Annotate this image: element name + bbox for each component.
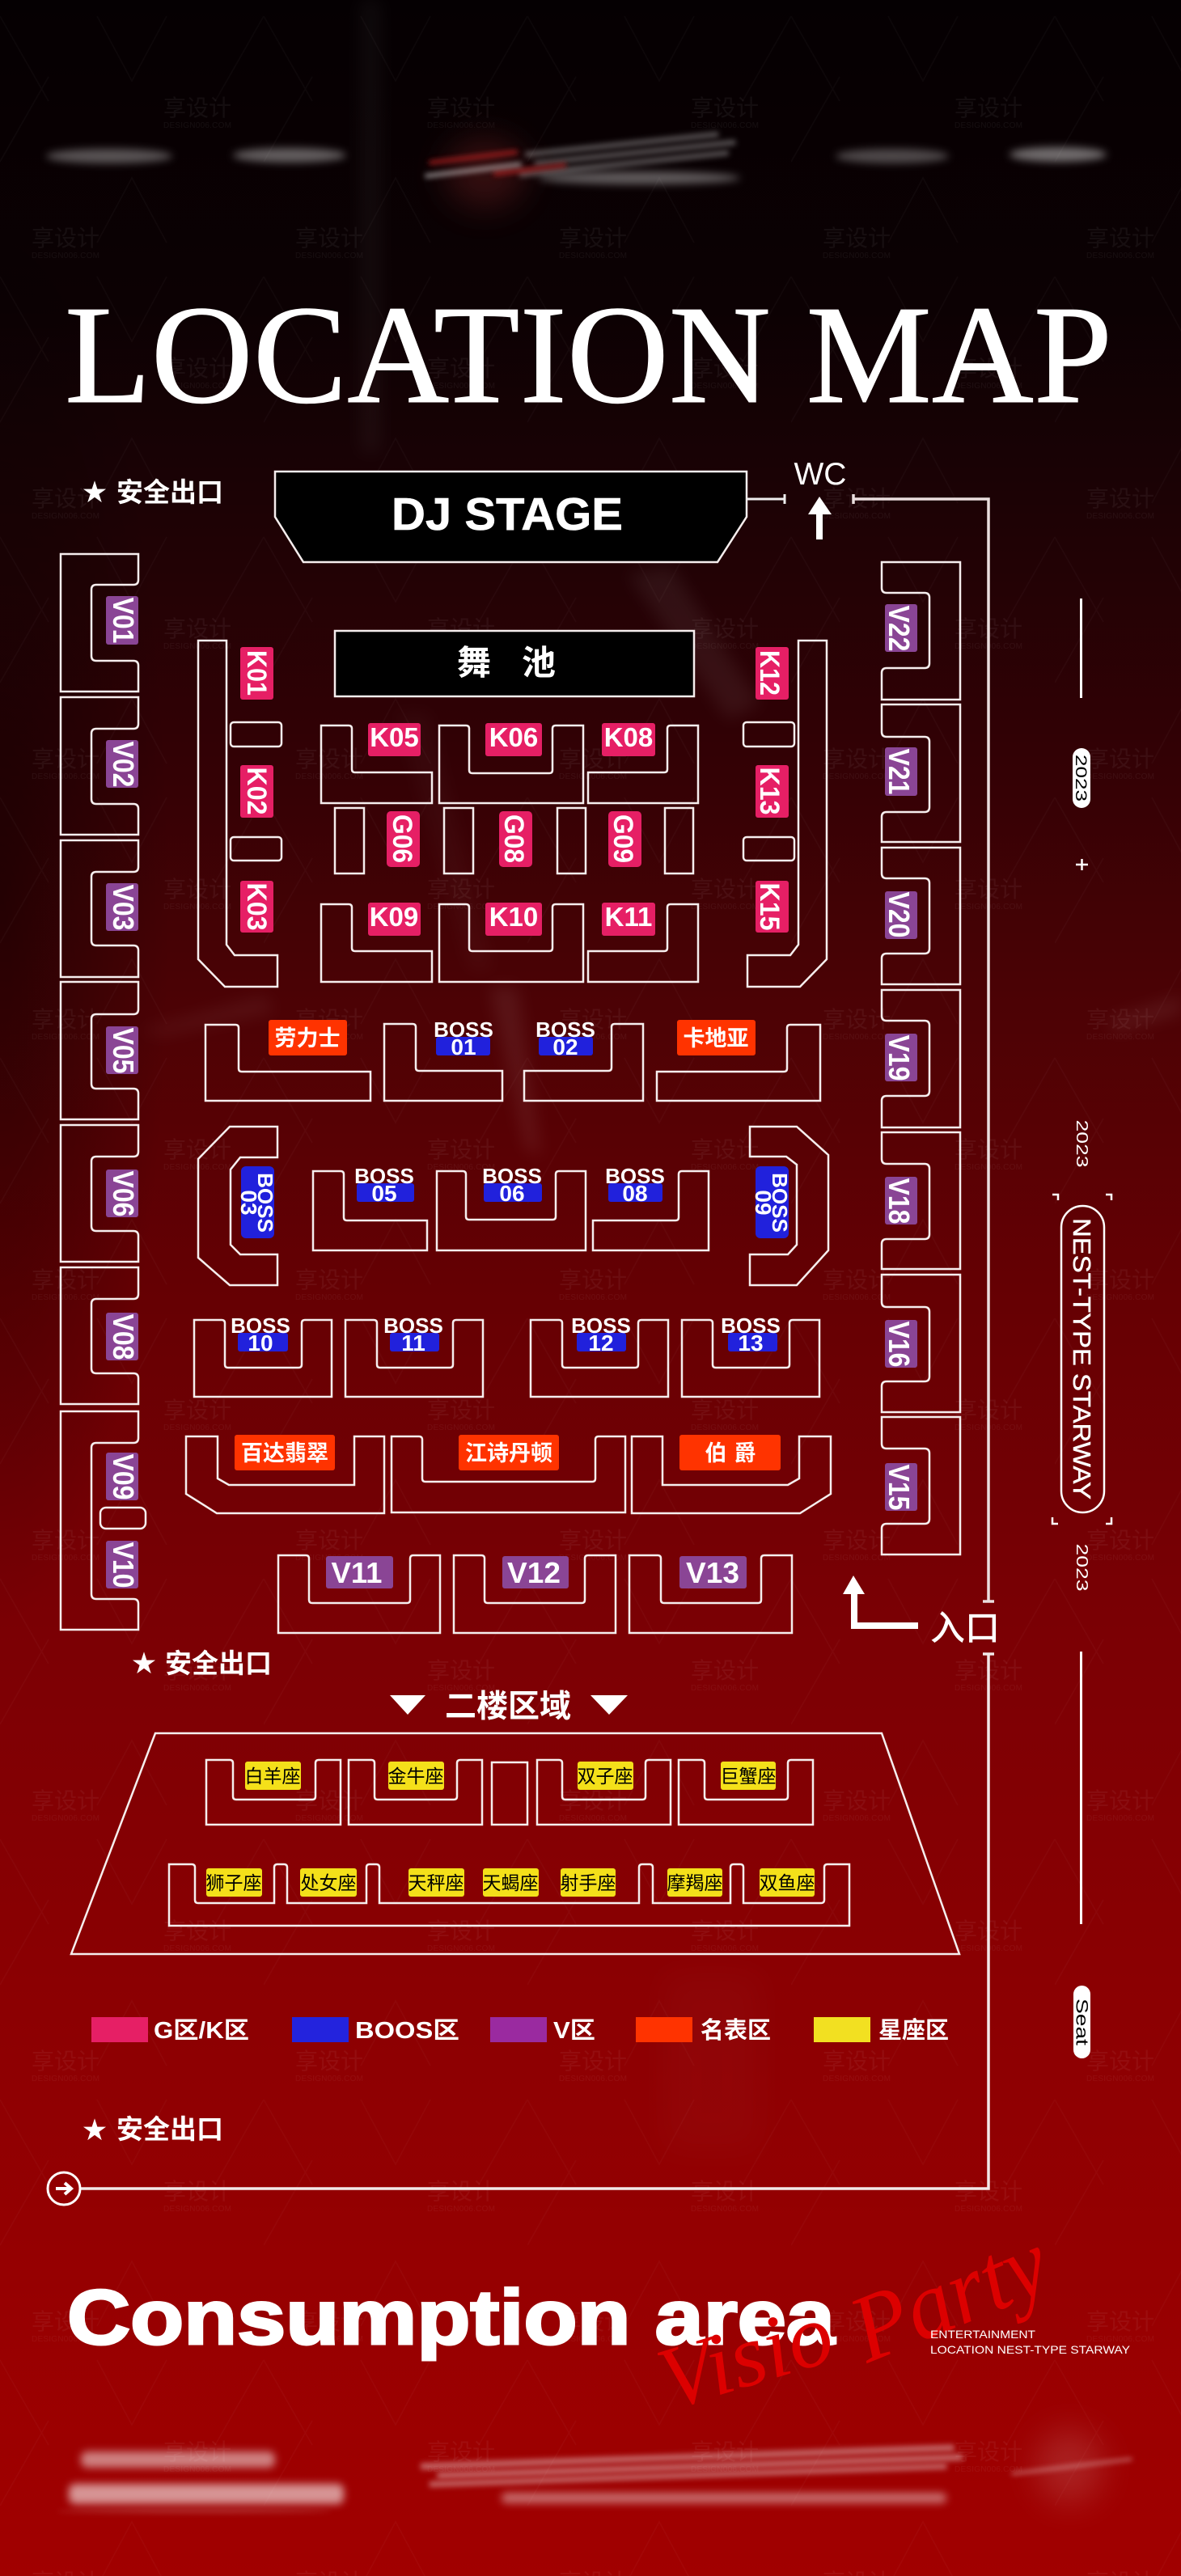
seat V01 [61,554,140,692]
seat 伯爵: 爵 [734,1441,756,1466]
script: Visio: Visio [646,2283,844,2429]
boss row 2 [198,1127,828,1285]
legend: 名表区 [701,2017,771,2044]
seat V21: V21 [883,749,916,794]
seat G08 [444,808,532,873]
seat V18 [882,1132,960,1269]
seat BOSS 08: BOSS [605,1164,665,1188]
lower constellation seats: 双鱼座 [759,1872,815,1893]
DJ stage: DJ STAGE [392,489,623,540]
seat V06: V06 [107,1171,140,1216]
title: LOCATION MAP [65,277,1112,433]
seat BOSS 12 [531,1313,668,1397]
seat V19: V19 [883,1035,916,1081]
seat BOSS 06 [437,1164,586,1250]
seat BOSS 05 [313,1164,427,1250]
second floor panel [71,1733,959,1954]
seat K10: K10 [489,902,538,932]
seat 金牛座 [349,1760,482,1825]
seat K12: K12 [754,650,785,696]
seat BOSS 03: 03 [236,1190,261,1216]
heading: Consumption area: Consumption area [67,2274,836,2361]
seat V11 [278,1555,440,1633]
seat 江诗丹顿 [392,1435,625,1512]
seat K01: K01 [241,650,272,696]
centre K and G seats [321,722,698,982]
entrance arrow and label: 入口 [930,1609,1000,1648]
seat G08: G08 [498,814,529,863]
legend: G区/K区 [154,2018,249,2044]
left V seats [61,554,146,1630]
blank seat [492,1762,527,1825]
seat V12: V12 [507,1556,561,1589]
small caption [930,2328,1131,2356]
seat BOSS 03: BOSS [253,1173,277,1233]
exit label: bottom: ★ [83,2117,107,2144]
seat K11: K11 [605,902,652,932]
pill: 2023 [1072,748,1090,808]
exit label: top left: ★ [83,480,107,506]
seat 金牛座: 金牛座 [388,1766,443,1787]
seat K08 [588,722,698,803]
seat 巨蟹座 [679,1760,813,1825]
seat V06 [61,1125,140,1262]
seat V21 [882,704,960,842]
seat V09 and V10 [61,1411,146,1630]
seat V02 [61,697,140,835]
legend: 星座区 [878,2017,949,2044]
seat BOSS 01: 01 [451,1034,476,1060]
seat BOSS 12: BOSS [571,1313,631,1338]
seat K10 [439,902,583,982]
bottom light streaks [57,2430,1132,2513]
seat BOSS 13: BOSS [721,1313,781,1338]
seat 劳力士: 劳力士 [275,1026,340,1051]
seat K08: K08 [604,722,653,752]
exit label: middle: 安全出口 [165,1648,272,1678]
seat G06: G06 [387,814,417,863]
seat BOSS 05: BOSS [354,1164,414,1188]
seat V15: V15 [883,1464,916,1511]
seat V20: V20 [883,891,916,938]
dance floor: 池 [522,644,556,682]
top light streaks [46,129,1107,209]
seat V15 [882,1417,960,1554]
seat BOSS 08: 08 [622,1181,648,1206]
exit label: middle: ★ [132,1651,156,1677]
legend: BOOS区 [355,2018,459,2044]
seat BOSS 12: 12 [588,1330,614,1356]
seat V08 [61,1267,140,1404]
seat V05: V05 [107,1027,140,1074]
second floor heading [390,1690,628,1724]
legend: V区 [553,2018,595,2044]
seat G06 [335,808,420,873]
seat 双子座 [537,1760,671,1825]
V row bottom [278,1555,792,1633]
badge: NEST-TYPE STARWAY: NEST-TYPE STARWAY [1068,1218,1096,1499]
seat K06 [439,722,583,803]
lower constellation seats: 处女座 [301,1872,356,1893]
seat 卡地亚 [657,1020,820,1101]
seat V13: V13 [686,1556,739,1589]
seat BOSS 01 [384,1017,502,1101]
seat BOSS 13: 13 [738,1330,764,1356]
seat K09: K09 [370,902,418,932]
seat BOSS 13 [682,1313,819,1397]
aisle route line [81,494,994,2189]
seat 巨蟹座: 巨蟹座 [720,1766,777,1787]
seat 卡地亚: 卡地亚 [683,1026,749,1051]
lower constellation seats [169,1864,849,1926]
dance floor [335,631,694,696]
seat 百达翡翠 [186,1435,384,1513]
pill: Seat: Seat [1073,1999,1090,2045]
right V seats [882,562,960,1554]
dance floor: 舞 [457,644,491,682]
seat K05: K05 [370,722,419,752]
seat K03: K03 [241,883,272,930]
seat V20 [882,848,960,984]
small caption: LOCATION NEST-TYPE STARWAY [930,2343,1131,2356]
seat BOSS 05: 05 [371,1181,397,1206]
seat V22: V22 [883,605,916,652]
lower constellation seats: 射手座 [560,1872,616,1893]
boss and watch row 1 [205,1017,820,1101]
seat K05 [321,722,432,803]
seat BOSS 10: 10 [248,1330,273,1356]
left K seats [198,641,281,987]
right column decoration [1052,599,1111,2058]
seat V22 [882,562,960,700]
seat BOSS 06: 06 [499,1181,525,1206]
seat 江诗丹顿: 江诗丹顿 [465,1441,552,1466]
seat K15: K15 [754,883,785,930]
seat V19 [882,990,960,1127]
seat BOSS 10 [194,1313,332,1397]
seat K11 [588,902,698,982]
seat BOSS 01: BOSS [434,1017,493,1042]
WC sign and arrow: WC [794,457,846,492]
right column decoration: 2023 [1073,1543,1090,1592]
seat BOSS 10: BOSS [231,1313,290,1338]
seat BOSS 09: 09 [751,1190,776,1216]
second floor heading: 二楼区域 [445,1690,571,1724]
seat G09 [557,808,693,873]
seat K13: K13 [754,767,785,815]
WC sign and arrow [747,457,846,539]
seat V03 [61,840,140,977]
seat K02: K02 [241,767,272,815]
seat K06: K06 [489,722,538,752]
seat BOSS 11: BOSS [383,1313,443,1338]
lower constellation seats: 摩羯座 [667,1872,723,1893]
lower constellation seats: 狮子座 [205,1872,262,1893]
DJ stage [275,472,747,562]
seat V11: V11 [332,1556,382,1589]
script: Party: Party [835,2209,1063,2383]
seat BOSS 11 [345,1313,483,1397]
lower constellation seats: 天蝎座 [482,1872,539,1893]
seat V03: V03 [107,885,140,930]
seat BOSS 03 [198,1127,277,1285]
badge: NEST-TYPE STARWAY [1052,1195,1111,1524]
seat V16 [882,1275,960,1412]
seat G09: G09 [607,814,638,863]
seat BOSS 02: 02 [552,1034,578,1060]
entrance arrow and label [843,1576,1000,1648]
exit label: top left: 安全出口 [116,477,223,507]
seat 伯爵: 伯 [705,1441,726,1466]
seat BOSS 02: BOSS [535,1017,595,1042]
seat V09 and V10: V09 [107,1454,140,1499]
right K seats [743,641,827,987]
seat V08: V08 [107,1313,140,1360]
seat V18: V18 [883,1178,916,1225]
seat 白羊座 [206,1760,341,1825]
lower constellation seats: 天秤座 [408,1872,464,1893]
seat 伯爵 [632,1435,831,1513]
exit circle icon [48,2172,80,2205]
exit label: bottom: 安全出口 [116,2114,223,2144]
legend [91,2017,949,2044]
seat BOSS 09: BOSS [768,1173,792,1233]
seat V09 and V10: V10 [107,1542,140,1588]
small caption: ENTERTAINMENT [930,2328,1035,2341]
pill: 2023: 2023 [1072,755,1089,802]
seat V12 [454,1555,616,1633]
seat BOSS 02 [524,1017,643,1101]
seat V05 [61,982,140,1119]
right column decoration: 2023 [1073,1119,1090,1168]
seat 白羊座: 白羊座 [244,1766,301,1787]
pill: Seat [1073,1986,1090,2058]
seat K09 [321,902,432,982]
seat V13 [629,1555,792,1633]
seat BOSS 08 [593,1164,709,1250]
watch row 2 [186,1435,831,1513]
seat BOSS 09 [750,1127,828,1285]
seat BOSS 06: BOSS [482,1164,542,1188]
boss row 3 [194,1313,819,1397]
seat V01: V01 [107,597,140,644]
seat V16: V16 [883,1322,916,1367]
seat 双子座: 双子座 [578,1766,633,1787]
seat V02: V02 [107,741,140,788]
seat BOSS 11: 11 [401,1330,425,1356]
seat 百达翡翠: 百达翡翠 [241,1441,328,1466]
seat 劳力士 [205,1020,370,1101]
